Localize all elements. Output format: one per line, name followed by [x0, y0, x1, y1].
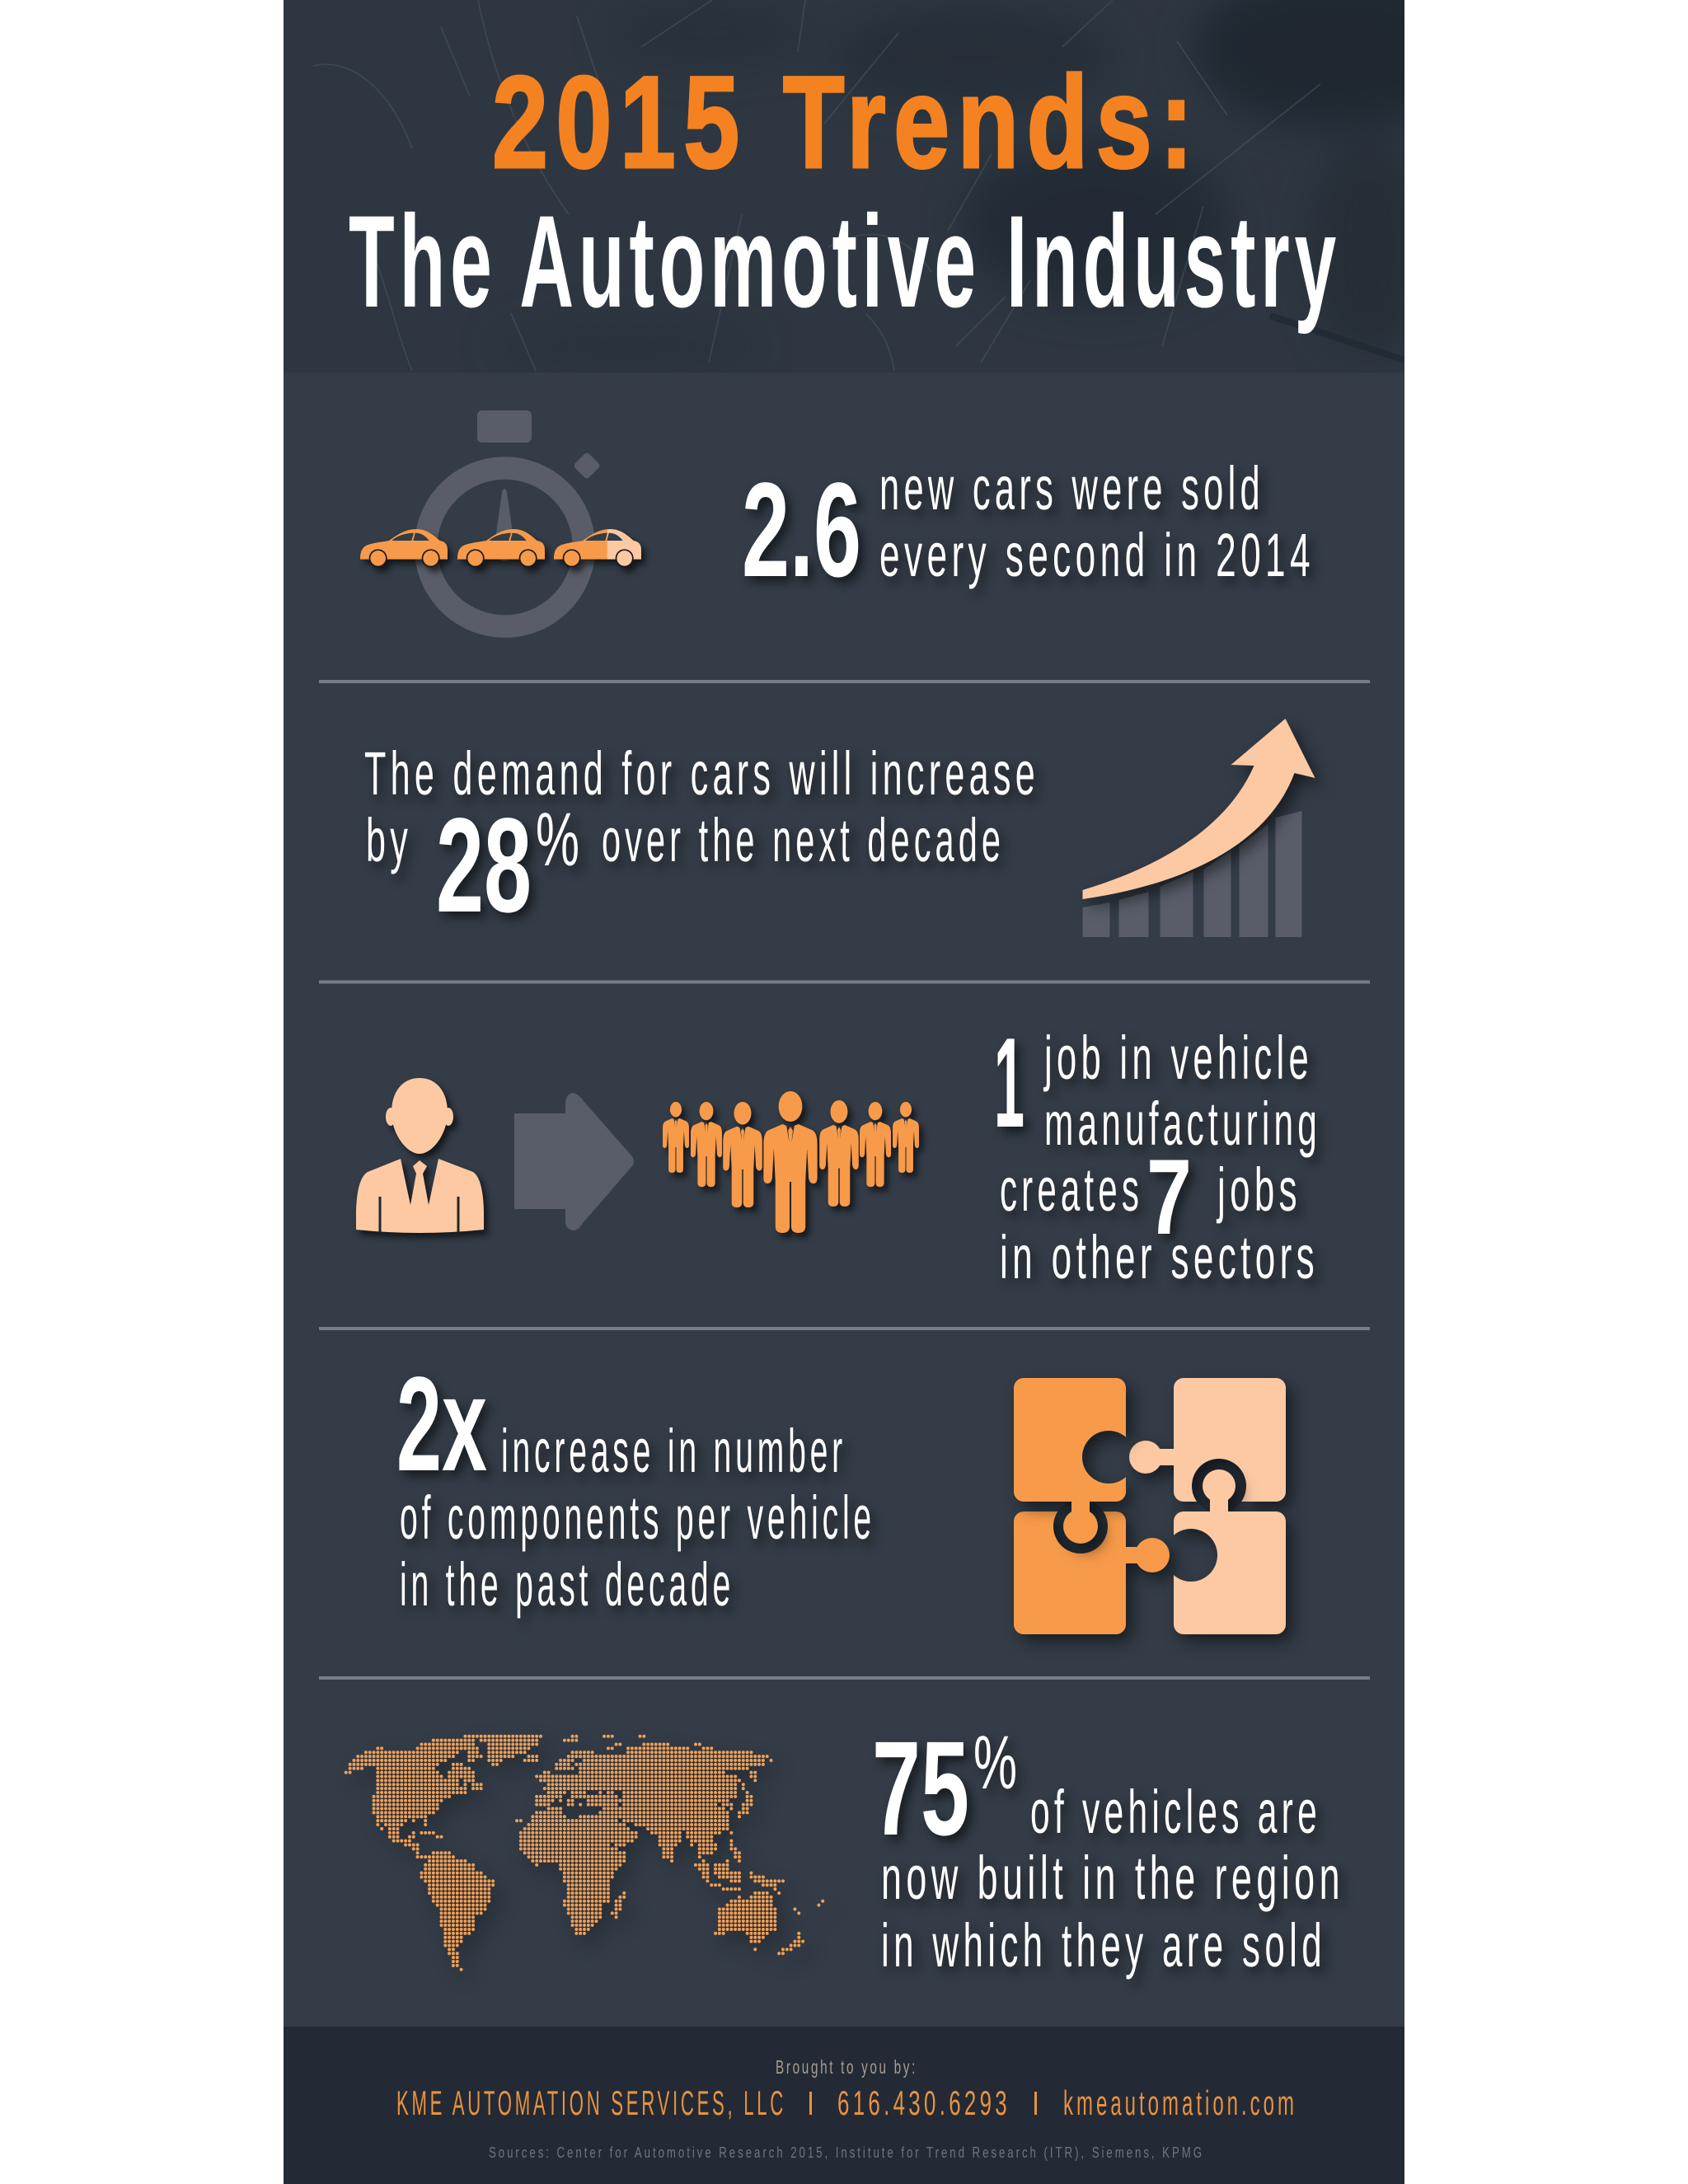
stat: 28% demand: The demand for cars will increase	[364, 739, 1039, 808]
stat: 2x components: 2x	[396, 1348, 487, 1499]
stat: 2x components: of components per vehicle	[400, 1483, 875, 1552]
stat: 1 job creates 7: 7	[1146, 1137, 1192, 1257]
stat: 1 job creates 7: manufacturing	[1044, 1090, 1321, 1158]
icon: stopwatch	[425, 410, 601, 626]
stat: 28% demand: by	[366, 806, 412, 874]
stat: 1 job creates 7: jobs	[1217, 1155, 1301, 1224]
arrow: one to many	[514, 1093, 634, 1230]
stat: 75% of vehicles: of vehicles are	[1030, 1778, 1321, 1846]
stat: 2x components: in the past decade	[400, 1550, 734, 1619]
stat: 2.6 new cars: new cars were sold	[879, 454, 1264, 523]
header with textured photo background	[284, 0, 1475, 373]
icon: puzzle pieces	[1014, 1378, 1286, 1634]
title line 1: 2015 Trends:	[492, 49, 1201, 195]
footer: brought to you by: Brought to you by:	[776, 2056, 917, 2078]
icon: group of seven people	[663, 1091, 919, 1233]
stat: 1 job creates 7: 1	[994, 1011, 1025, 1154]
icon: growth arrow	[1083, 719, 1315, 899]
stat: 75% of vehicles	[872, 1713, 1344, 1980]
stat: 28% demand: 28	[436, 790, 532, 940]
stat: 2.6 new cars: 2.6	[742, 454, 861, 605]
icon: three cars	[360, 529, 641, 567]
footer panel	[284, 2027, 1404, 2184]
infographic canvas	[284, 0, 1404, 2184]
main panel background	[284, 0, 1404, 2184]
footer: contact line: KME AUTOMATION SERVICES, LLC	[396, 2083, 786, 2122]
stat: 1 job creates 7: creates	[1000, 1155, 1143, 1224]
stat: 1 job creates 7: job in vehicle	[1043, 1024, 1313, 1092]
footer: contact line: kmeautomation.com	[1063, 2083, 1297, 2122]
stat: 2x components: increase in number	[501, 1417, 846, 1485]
stat: 28% demand	[364, 739, 1039, 940]
stat: 1 job creates 7	[994, 1011, 1321, 1291]
chart: dotted world map	[346, 1736, 823, 1970]
stat: 75% of vehicles: 75	[872, 1713, 969, 1863]
stat: 28% demand: over the next decade	[602, 806, 1005, 874]
chart: rising bars	[1083, 811, 1302, 937]
icon: single business person	[356, 1078, 484, 1233]
stat: 75% of vehicles: %	[973, 1721, 1017, 1805]
stat: 75% of vehicles: now built in the region	[881, 1844, 1344, 1912]
stat: 1 job creates 7: in other sectors	[1000, 1223, 1319, 1291]
stat: 2.6 new cars: every second in 2014	[879, 521, 1315, 589]
footer: sources: Sources: Center for Automotive Research 2015, Institute for Trend Research (ITR), Siemens, KPMG	[489, 2144, 1204, 2161]
stat: 2x components	[396, 1348, 875, 1619]
stat: 75% of vehicles: in which they are sold	[881, 1911, 1326, 1980]
footer: contact line: 616.430.6293	[837, 2083, 1010, 2122]
stat: 2.6 new cars	[742, 454, 1315, 605]
stat: 28% demand: %	[536, 798, 579, 882]
